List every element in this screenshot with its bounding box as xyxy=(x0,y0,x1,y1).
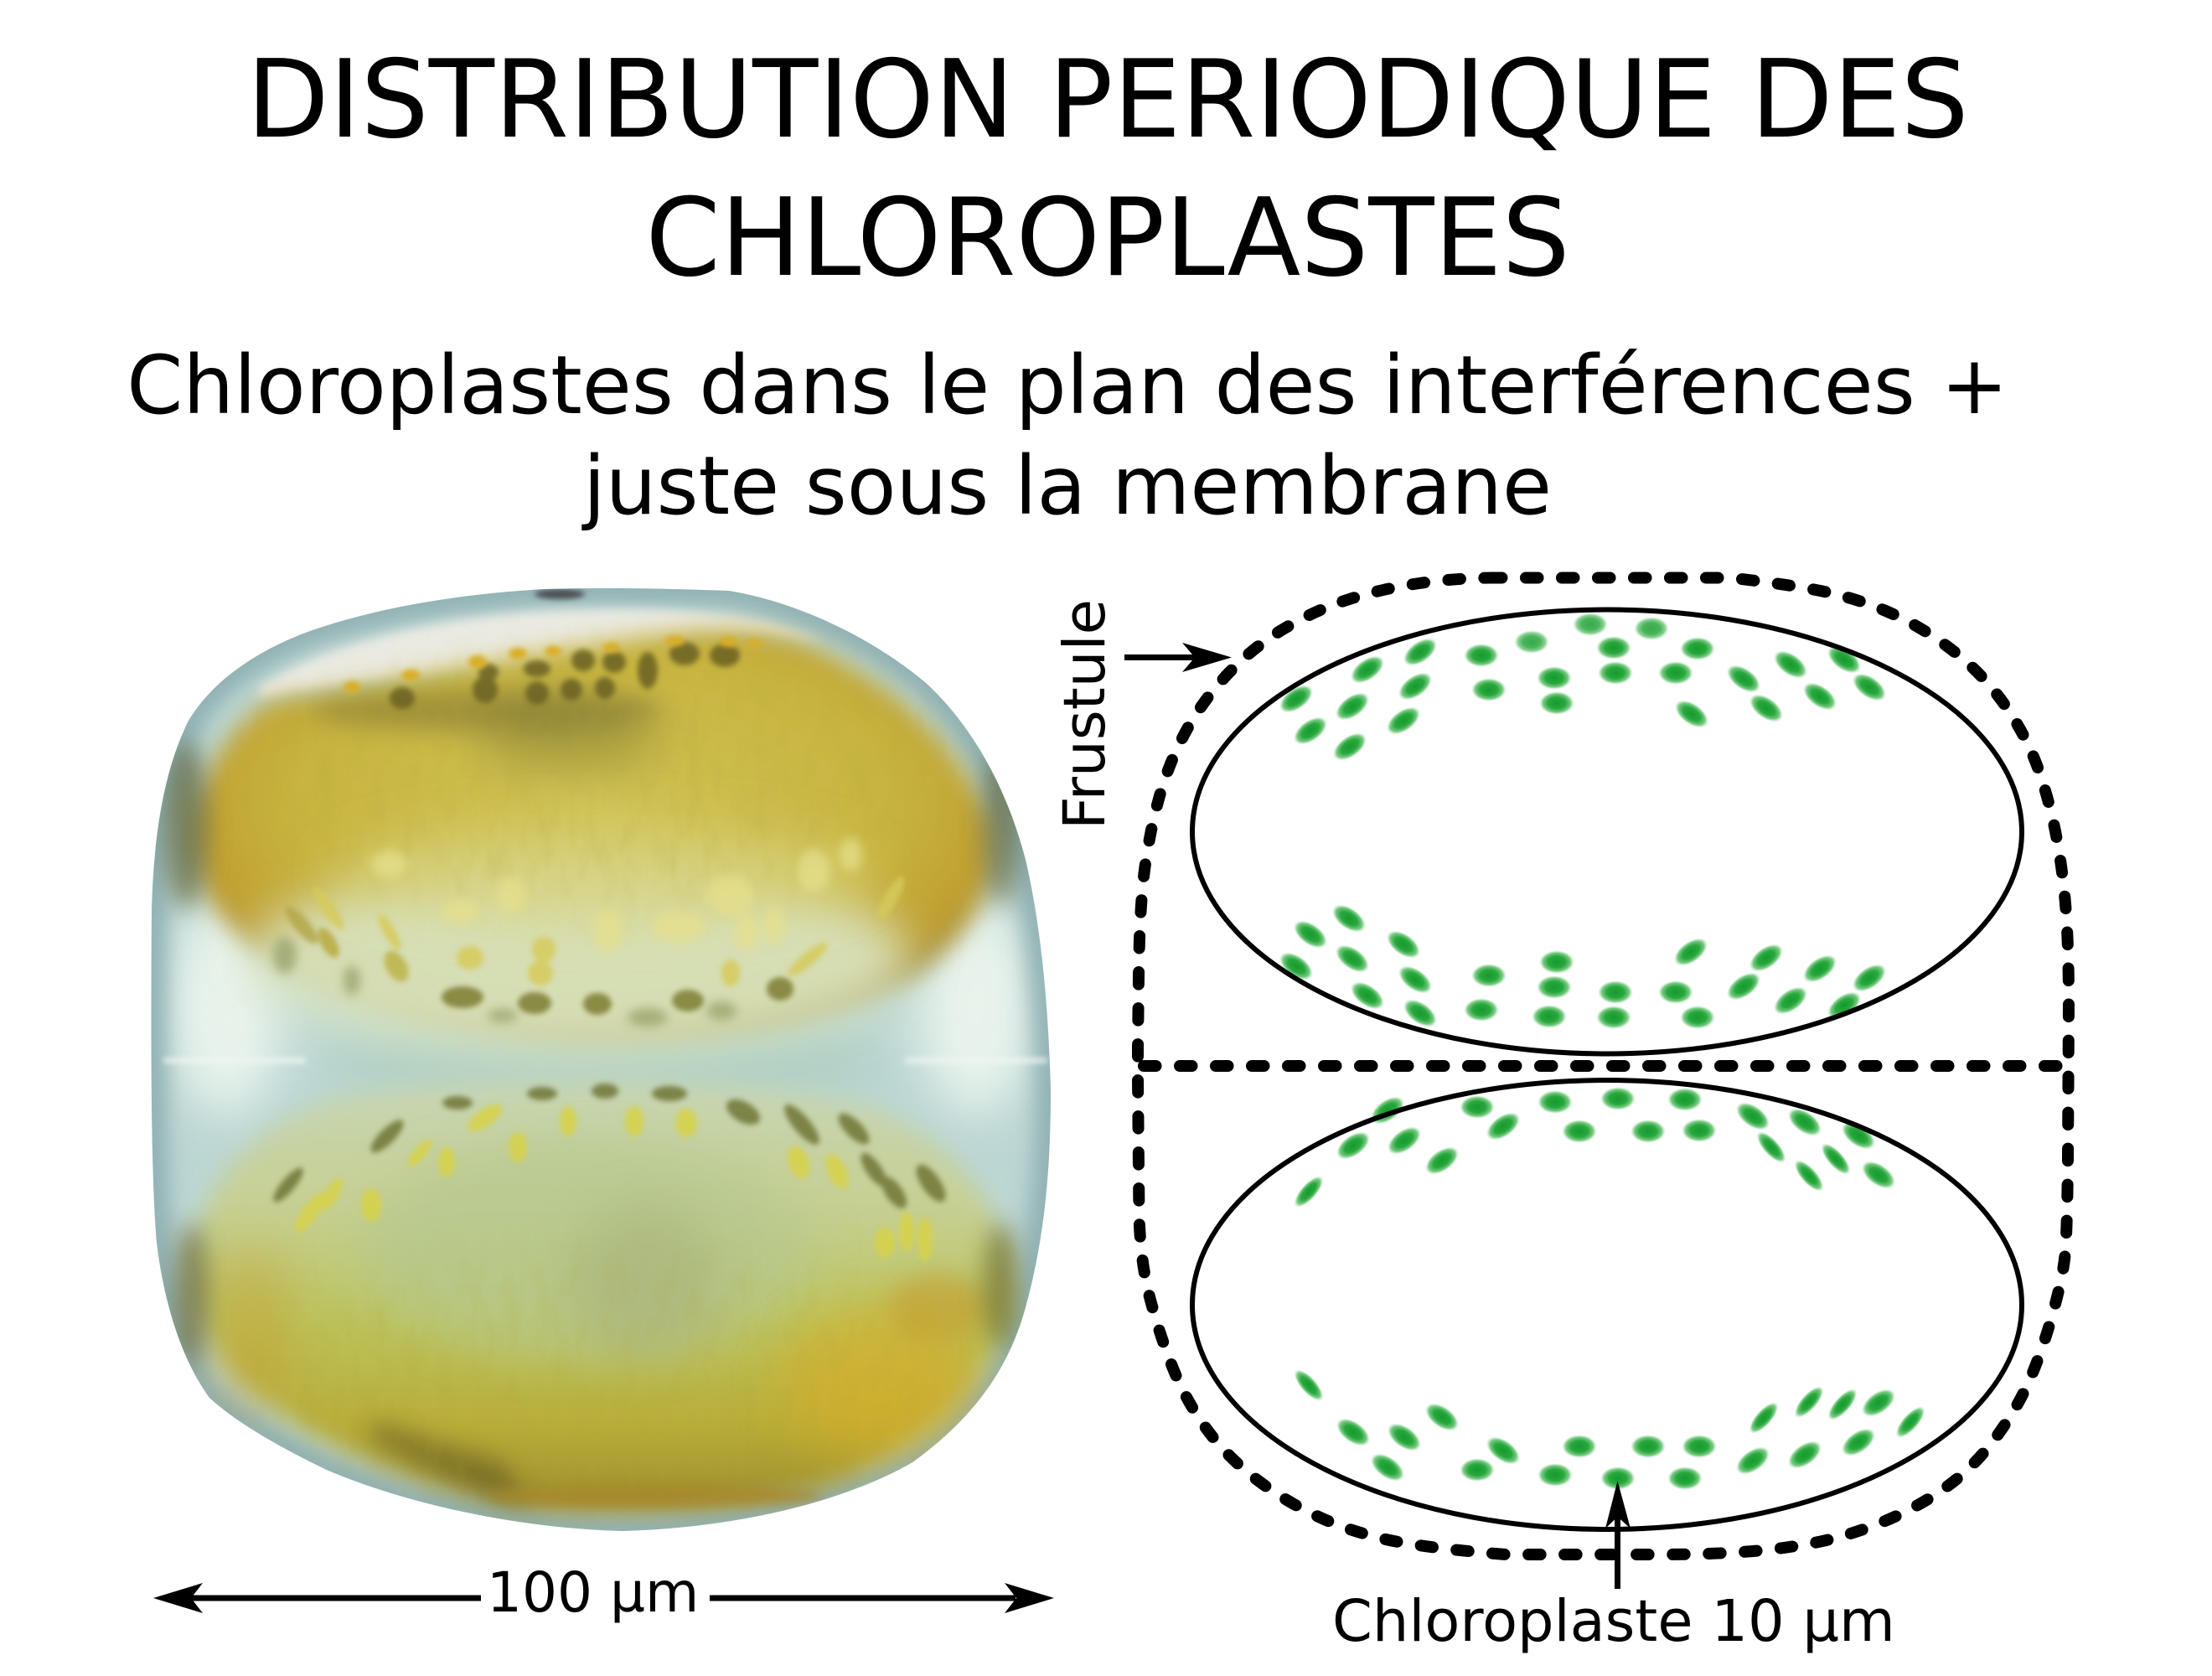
dark beads of upper cell xyxy=(442,977,793,1015)
arrow: Frustule xyxy=(1124,643,1232,672)
light band above upper cell xyxy=(260,609,825,700)
lower cell outline xyxy=(1192,1080,2022,1529)
arrow: chloroplast xyxy=(1605,1481,1631,1589)
subtitle: juste sous la membrane xyxy=(581,439,1552,533)
top notch mark xyxy=(535,589,585,599)
subtitle: Chloroplastes dans le plan des interférences + xyxy=(127,339,2008,432)
pale lower part of upper cell xyxy=(243,863,913,1056)
chloroplasts: lower cell xyxy=(1289,1087,1930,1490)
scale bar: 100 µm: 100 µm xyxy=(487,1560,699,1625)
chloroplasts: upper cell xyxy=(1274,613,1891,1032)
texture xyxy=(392,665,752,1336)
title xyxy=(246,38,1969,301)
title: DISTRIBUTION PERIODIQUE DES xyxy=(246,38,1969,163)
frustule outline xyxy=(1138,578,2069,1554)
title: CHLOROPLASTES xyxy=(645,176,1570,301)
subtitle xyxy=(127,339,2008,533)
seam xyxy=(163,1058,306,1063)
micrograph: diatom cell xyxy=(142,582,1060,1538)
scale bar: 100 µm xyxy=(153,1560,1054,1625)
frustule division line xyxy=(1144,1060,2066,1072)
lower cell body xyxy=(192,1080,1011,1514)
label: Frustule: Frustule xyxy=(1052,599,1119,830)
beads of lower cell xyxy=(269,1084,951,1213)
label: chloroplast size: Chloroplaste 10 µm xyxy=(1332,1588,1895,1655)
upper cell outline xyxy=(1192,610,2022,1054)
upper cell body xyxy=(193,630,994,1037)
ring of dark alveoli xyxy=(390,642,740,709)
